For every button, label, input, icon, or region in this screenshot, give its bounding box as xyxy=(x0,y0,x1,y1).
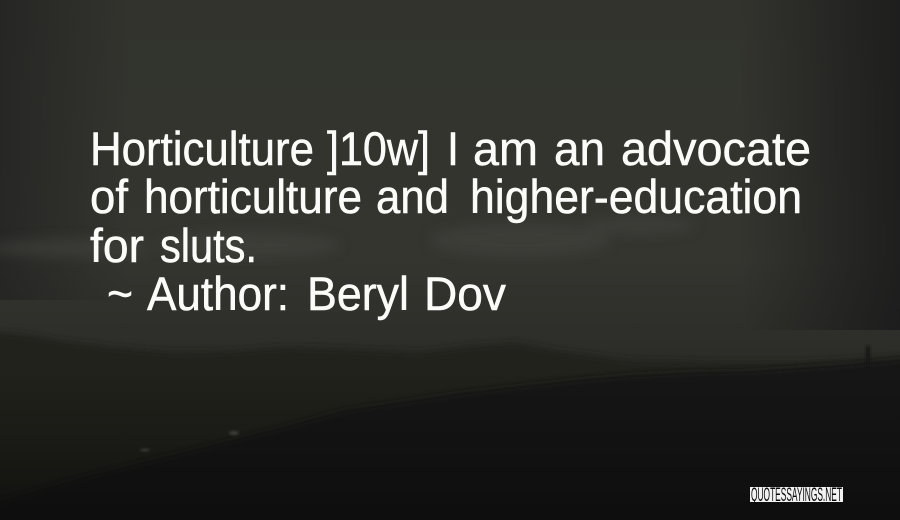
background: bottom shading xyxy=(0,370,900,520)
line 1: am xyxy=(473,122,538,175)
line 1: ]10w] xyxy=(327,122,430,175)
line 2: higher-education xyxy=(470,170,802,223)
line 3 xyxy=(90,219,257,272)
watermark badge xyxy=(750,485,843,506)
author line: Dov xyxy=(424,267,506,320)
line 2 xyxy=(90,170,802,223)
background: tower silhouette xyxy=(866,346,870,366)
author line: ~ xyxy=(107,267,133,320)
background: distant lights xyxy=(140,431,239,451)
line 1: advocate xyxy=(621,122,811,175)
line 2: of xyxy=(90,170,129,223)
line 3: for xyxy=(90,219,144,272)
author line: Beryl xyxy=(307,267,409,320)
line 2: and xyxy=(376,170,449,223)
author line: Author: xyxy=(147,267,289,320)
background: near ridge xyxy=(0,358,900,520)
line 1: Horticulture xyxy=(90,122,314,175)
background: far ridge xyxy=(0,331,900,520)
line 1: an xyxy=(554,122,605,175)
line 1: I xyxy=(447,122,459,175)
author line xyxy=(107,267,506,320)
line 1 xyxy=(90,122,811,175)
quote text xyxy=(90,122,811,320)
line 2: horticulture xyxy=(144,170,362,223)
background: faint clouds xyxy=(0,216,695,258)
line 3: sluts. xyxy=(160,219,257,272)
